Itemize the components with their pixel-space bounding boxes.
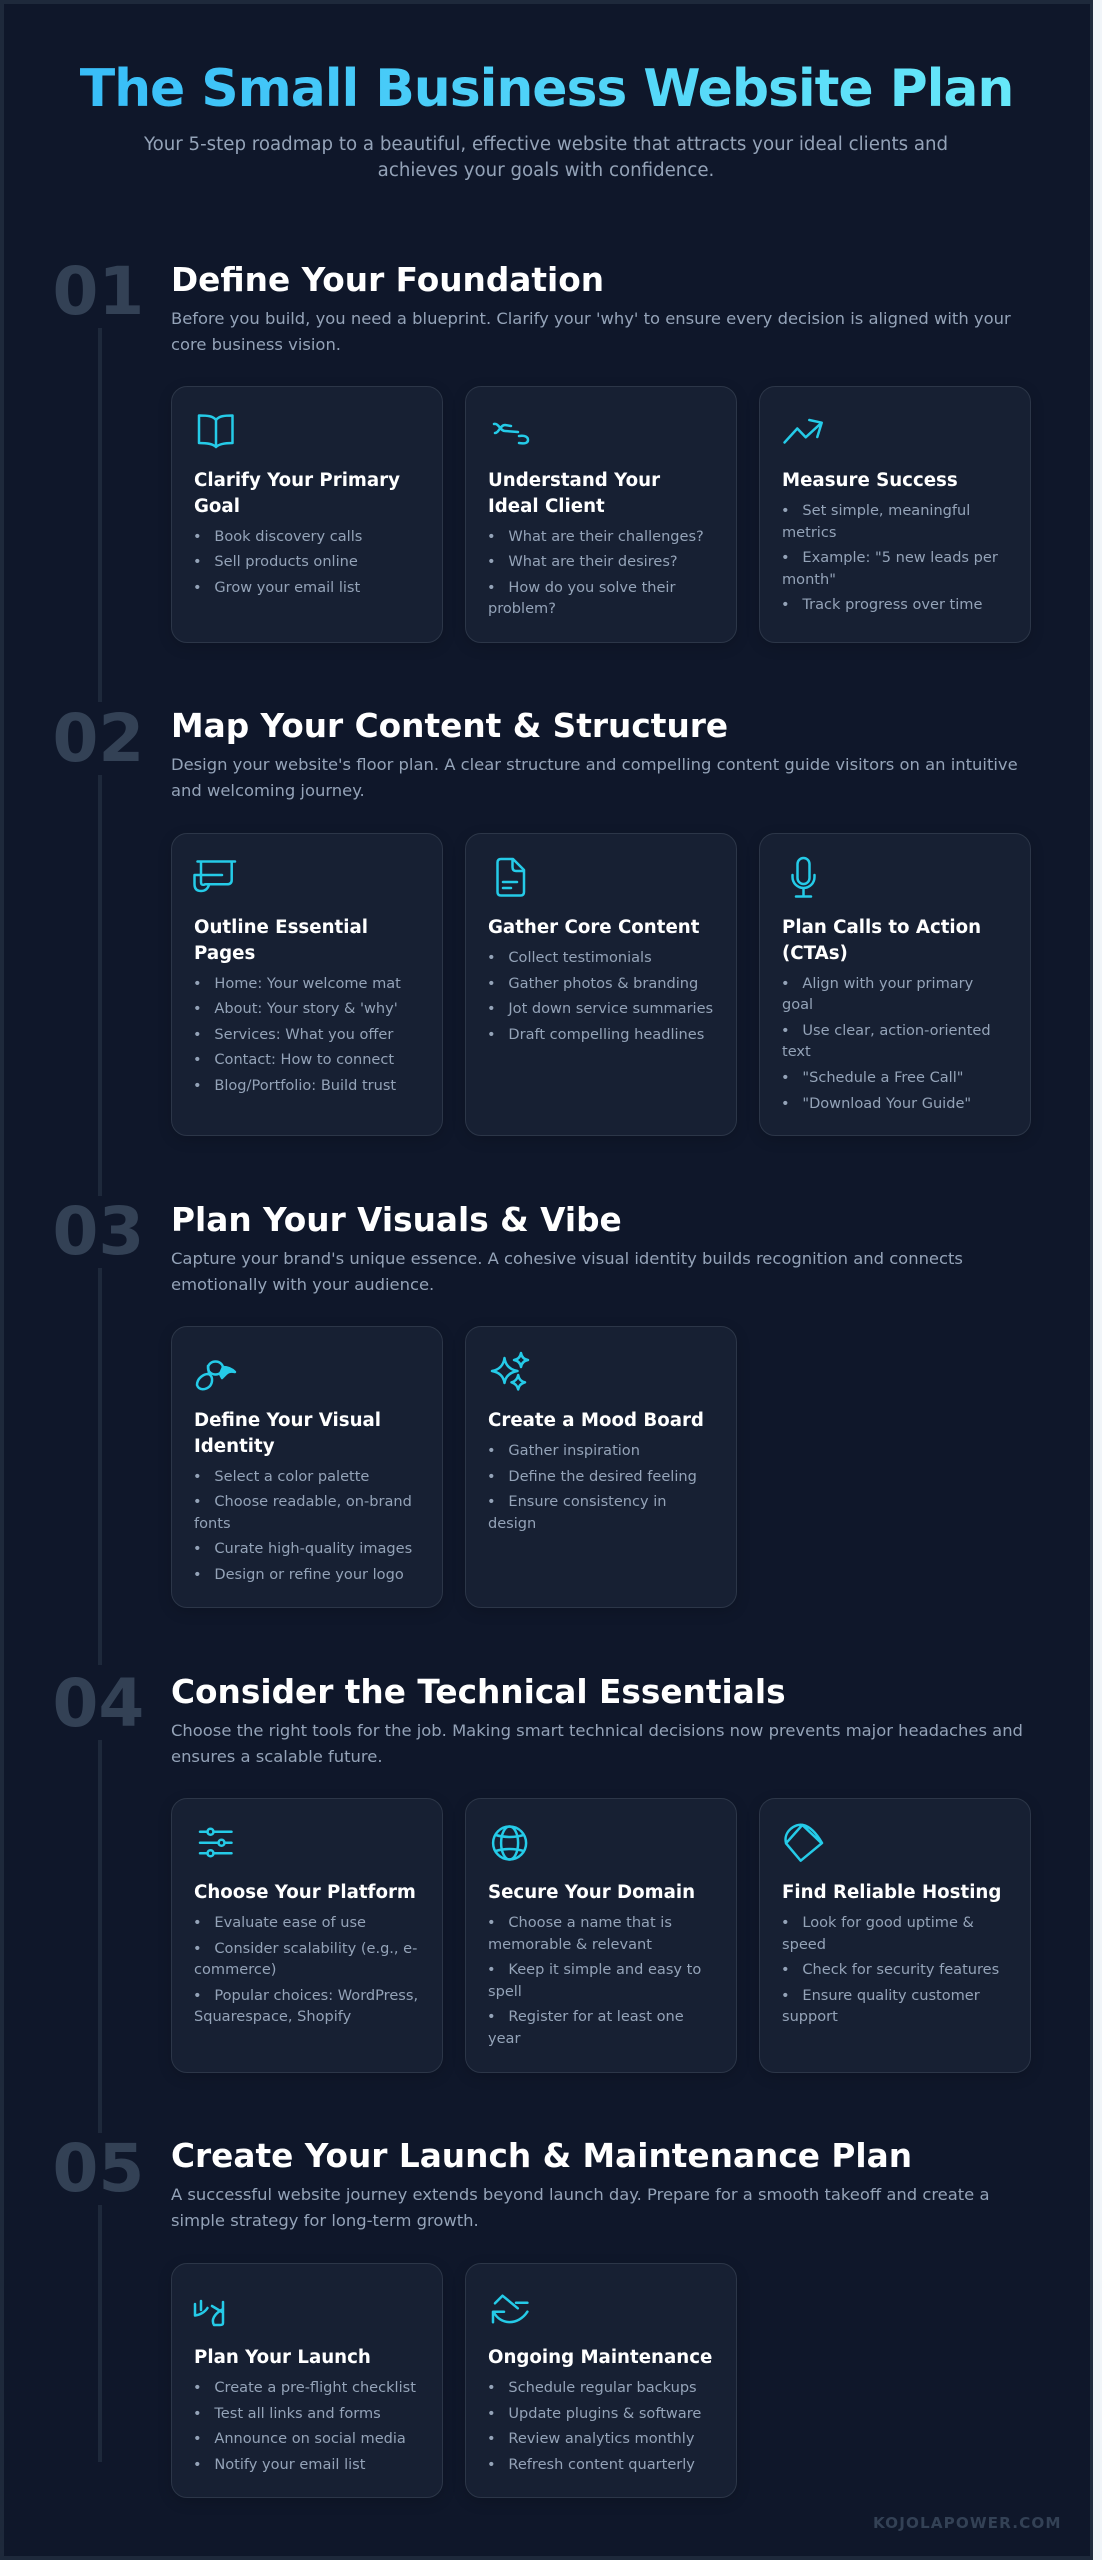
- card list: About: Your story & 'why': [214, 1000, 398, 1017]
- card list: Draft compelling headlines: [508, 1026, 704, 1043]
- card title: Plan Your Launch: [194, 2347, 371, 2368]
- section 04: consider the technical essentials: [52, 1665, 1031, 2133]
- heading 05: Create Your Launch & Maintenance Plan: [171, 2137, 912, 2175]
- card list: "Schedule a Free Call": [802, 1069, 963, 1086]
- card list: Choose readable, on-brand fonts: [194, 1493, 412, 1532]
- card: create a mood board: [465, 1326, 737, 1608]
- card list: Check for security features: [802, 1961, 999, 1978]
- step number 01: 01: [52, 253, 144, 330]
- card list: Sell products online: [214, 553, 358, 570]
- card list: Blog/Portfolio: Build trust: [214, 1077, 396, 1094]
- card list: [782, 975, 991, 1112]
- icon: microphone: [791, 856, 816, 898]
- card list: Select a color palette: [214, 1468, 369, 1485]
- card list: Set simple, meaningful metrics: [782, 502, 970, 541]
- card list: Notify your email list: [214, 2456, 365, 2473]
- icon: squiggle people: [492, 422, 530, 445]
- card list: [195, 975, 401, 1094]
- card: define your visual identity: [171, 1326, 443, 1608]
- icon: sparkles: [490, 1352, 530, 1391]
- card list: Services: What you offer: [214, 1026, 393, 1043]
- card list: Home: Your welcome mat: [214, 975, 401, 992]
- card list: Collect testimonials: [508, 949, 652, 966]
- icon: refresh arrows: [492, 2294, 529, 2324]
- card list: Grow your email list: [214, 579, 360, 596]
- timeline line 04: [98, 1740, 102, 2133]
- card list: [489, 949, 713, 1043]
- card title: Plan Calls to Action (CTAs): [782, 917, 981, 964]
- card: outline essential pages: [171, 833, 443, 1136]
- card list: Announce on social media: [214, 2430, 406, 2447]
- step number 03: 03: [52, 1193, 144, 1270]
- card: plan calls to action: [759, 833, 1031, 1136]
- card list: [782, 1914, 999, 2025]
- timeline line 01: [98, 328, 102, 702]
- icon: trending up arrow: [783, 418, 823, 444]
- card list: Register for at least one year: [488, 2008, 684, 2047]
- step number 04: 04: [52, 1665, 144, 1742]
- heading 03: Plan Your Visuals & Vibe: [171, 1201, 622, 1239]
- heading 04: Consider the Technical Essentials: [171, 1673, 786, 1711]
- card list: Contact: How to connect: [214, 1051, 394, 1068]
- card list: Jot down service summaries: [508, 1000, 713, 1017]
- card list: [195, 528, 362, 596]
- timeline line 02: [98, 775, 102, 1196]
- card list: [195, 2379, 416, 2473]
- description 01: Before you build, you need a blueprint. Clarify your 'why' to ensure every decision is aligned with your core business vision.: [171, 309, 1011, 354]
- card list: Keep it simple and easy to spell: [488, 1961, 701, 2000]
- card: ongoing maintenance: [465, 2263, 737, 2498]
- description 02: Design your website's floor plan. A clear structure and compelling content guide visitors on an intuitive and welcoming journey.: [171, 755, 1018, 800]
- card: understand your ideal client: [465, 386, 737, 643]
- card list: Gather photos & branding: [508, 975, 698, 992]
- subtitle: [144, 134, 948, 181]
- card list: [782, 502, 998, 613]
- card list: Look for good uptime & speed: [782, 1914, 974, 1953]
- card list: [488, 528, 704, 617]
- title: The Small Business Website Plan: [80, 59, 1013, 119]
- heading 02: Map Your Content & Structure: [171, 707, 728, 745]
- icon: globe: [492, 1825, 528, 1861]
- icon: open book: [198, 414, 234, 448]
- description 04: Choose the right tools for the job. Making smart technical decisions now prevents major headaches and ensures a scalable future.: [171, 1721, 1023, 1766]
- icon: document: [496, 858, 526, 897]
- card title: Define Your Visual Identity: [194, 1410, 381, 1457]
- step number 02: 02: [52, 700, 144, 777]
- card: plan your launch: [171, 2263, 443, 2498]
- card: secure your domain: [465, 1798, 737, 2073]
- card list: [194, 1914, 418, 2025]
- card list: Ensure consistency in design: [488, 1493, 667, 1532]
- card list: [194, 1468, 412, 1583]
- card list: Create a pre-flight checklist: [214, 2379, 416, 2396]
- step number 05: 05: [52, 2130, 144, 2207]
- card list: "Download Your Guide": [802, 1095, 971, 1112]
- subtitle: achieves your goals with confidence.: [378, 160, 714, 181]
- card list: Book discovery calls: [214, 528, 362, 545]
- card: measure success: [759, 386, 1031, 643]
- card title: Find Reliable Hosting: [782, 1882, 1001, 1903]
- card title: Secure Your Domain: [488, 1882, 695, 1903]
- card list: Use clear, action-oriented text: [782, 1022, 991, 1060]
- card list: [488, 1914, 701, 2047]
- watermark: KOJOLAPOWER.COM: [873, 2514, 1062, 2532]
- card title: Gather Core Content: [488, 917, 699, 938]
- card list: Review analytics monthly: [508, 2430, 694, 2447]
- card: find reliable hosting: [759, 1798, 1031, 2073]
- card list: [489, 2379, 701, 2473]
- card title: Choose Your Platform: [194, 1882, 416, 1903]
- card: gather core content: [465, 833, 737, 1136]
- card list: Align with your primary goal: [782, 975, 973, 1013]
- card list: [488, 1442, 697, 1532]
- card list: Define the desired feeling: [508, 1468, 697, 1485]
- card list: What are their challenges?: [508, 528, 704, 545]
- card: choose your platform: [171, 1798, 443, 2073]
- heading 01: Define Your Foundation: [171, 261, 604, 299]
- section 03: plan your visuals and vibe: [52, 1193, 963, 1665]
- card list: Schedule regular backups: [508, 2379, 697, 2396]
- card title: Outline Essential Pages: [194, 917, 368, 964]
- card list: Update plugins & software: [508, 2405, 701, 2422]
- card list: Track progress over time: [802, 596, 982, 613]
- card list: Popular choices: WordPress, Squarespace, Shopify: [194, 1987, 418, 2025]
- timeline line 05: [98, 2205, 102, 2462]
- card list: Ensure quality customer support: [782, 1987, 980, 2025]
- icon: rocket fragments: [194, 2300, 224, 2326]
- description 03: Capture your brand's unique essence. A cohesive visual identity builds recognition and connects emotionally with your audience.: [171, 1249, 963, 1294]
- card list: How do you solve their problem?: [488, 579, 675, 617]
- icon: palette and brush: [196, 1360, 236, 1390]
- card list: Curate high-quality images: [214, 1540, 412, 1557]
- icon: scroll: [193, 860, 236, 892]
- icon: sliders: [198, 1828, 233, 1858]
- card title: Measure Success: [782, 470, 958, 491]
- card list: What are their desires?: [508, 553, 678, 570]
- section 02: map your content and structure: [52, 700, 1031, 1196]
- card title: Understand Your Ideal Client: [488, 470, 660, 517]
- subtitle: Your 5-step roadmap to a beautiful, effective website that attracts your ideal clients and: [144, 134, 948, 155]
- card: clarify your primary goal: [171, 386, 443, 643]
- card list: Example: "5 new leads per month": [782, 549, 998, 588]
- card list: Evaluate ease of use: [214, 1914, 366, 1931]
- card title: Ongoing Maintenance: [488, 2347, 712, 2368]
- description 05: A successful website journey extends beyond launch day. Prepare for a smooth takeoff and create a simple strategy for long-term growth.: [171, 2185, 989, 2230]
- timeline line 03: [98, 1268, 102, 1665]
- section 01: define your foundation: [52, 253, 1031, 702]
- icon: diamond tag: [784, 1824, 824, 1862]
- section 05: create your launch and maintenance plan: [52, 2130, 989, 2498]
- card list: Refresh content quarterly: [508, 2456, 695, 2473]
- card list: Consider scalability (e.g., e-commerce): [194, 1940, 417, 1978]
- card list: Gather inspiration: [508, 1442, 640, 1459]
- card title: Create a Mood Board: [488, 1410, 704, 1431]
- card title: Clarify Your Primary Goal: [194, 470, 400, 517]
- card list: Test all links and forms: [214, 2405, 381, 2422]
- card list: Design or refine your logo: [214, 1566, 404, 1583]
- card list: Choose a name that is memorable & relevant: [488, 1914, 672, 1953]
